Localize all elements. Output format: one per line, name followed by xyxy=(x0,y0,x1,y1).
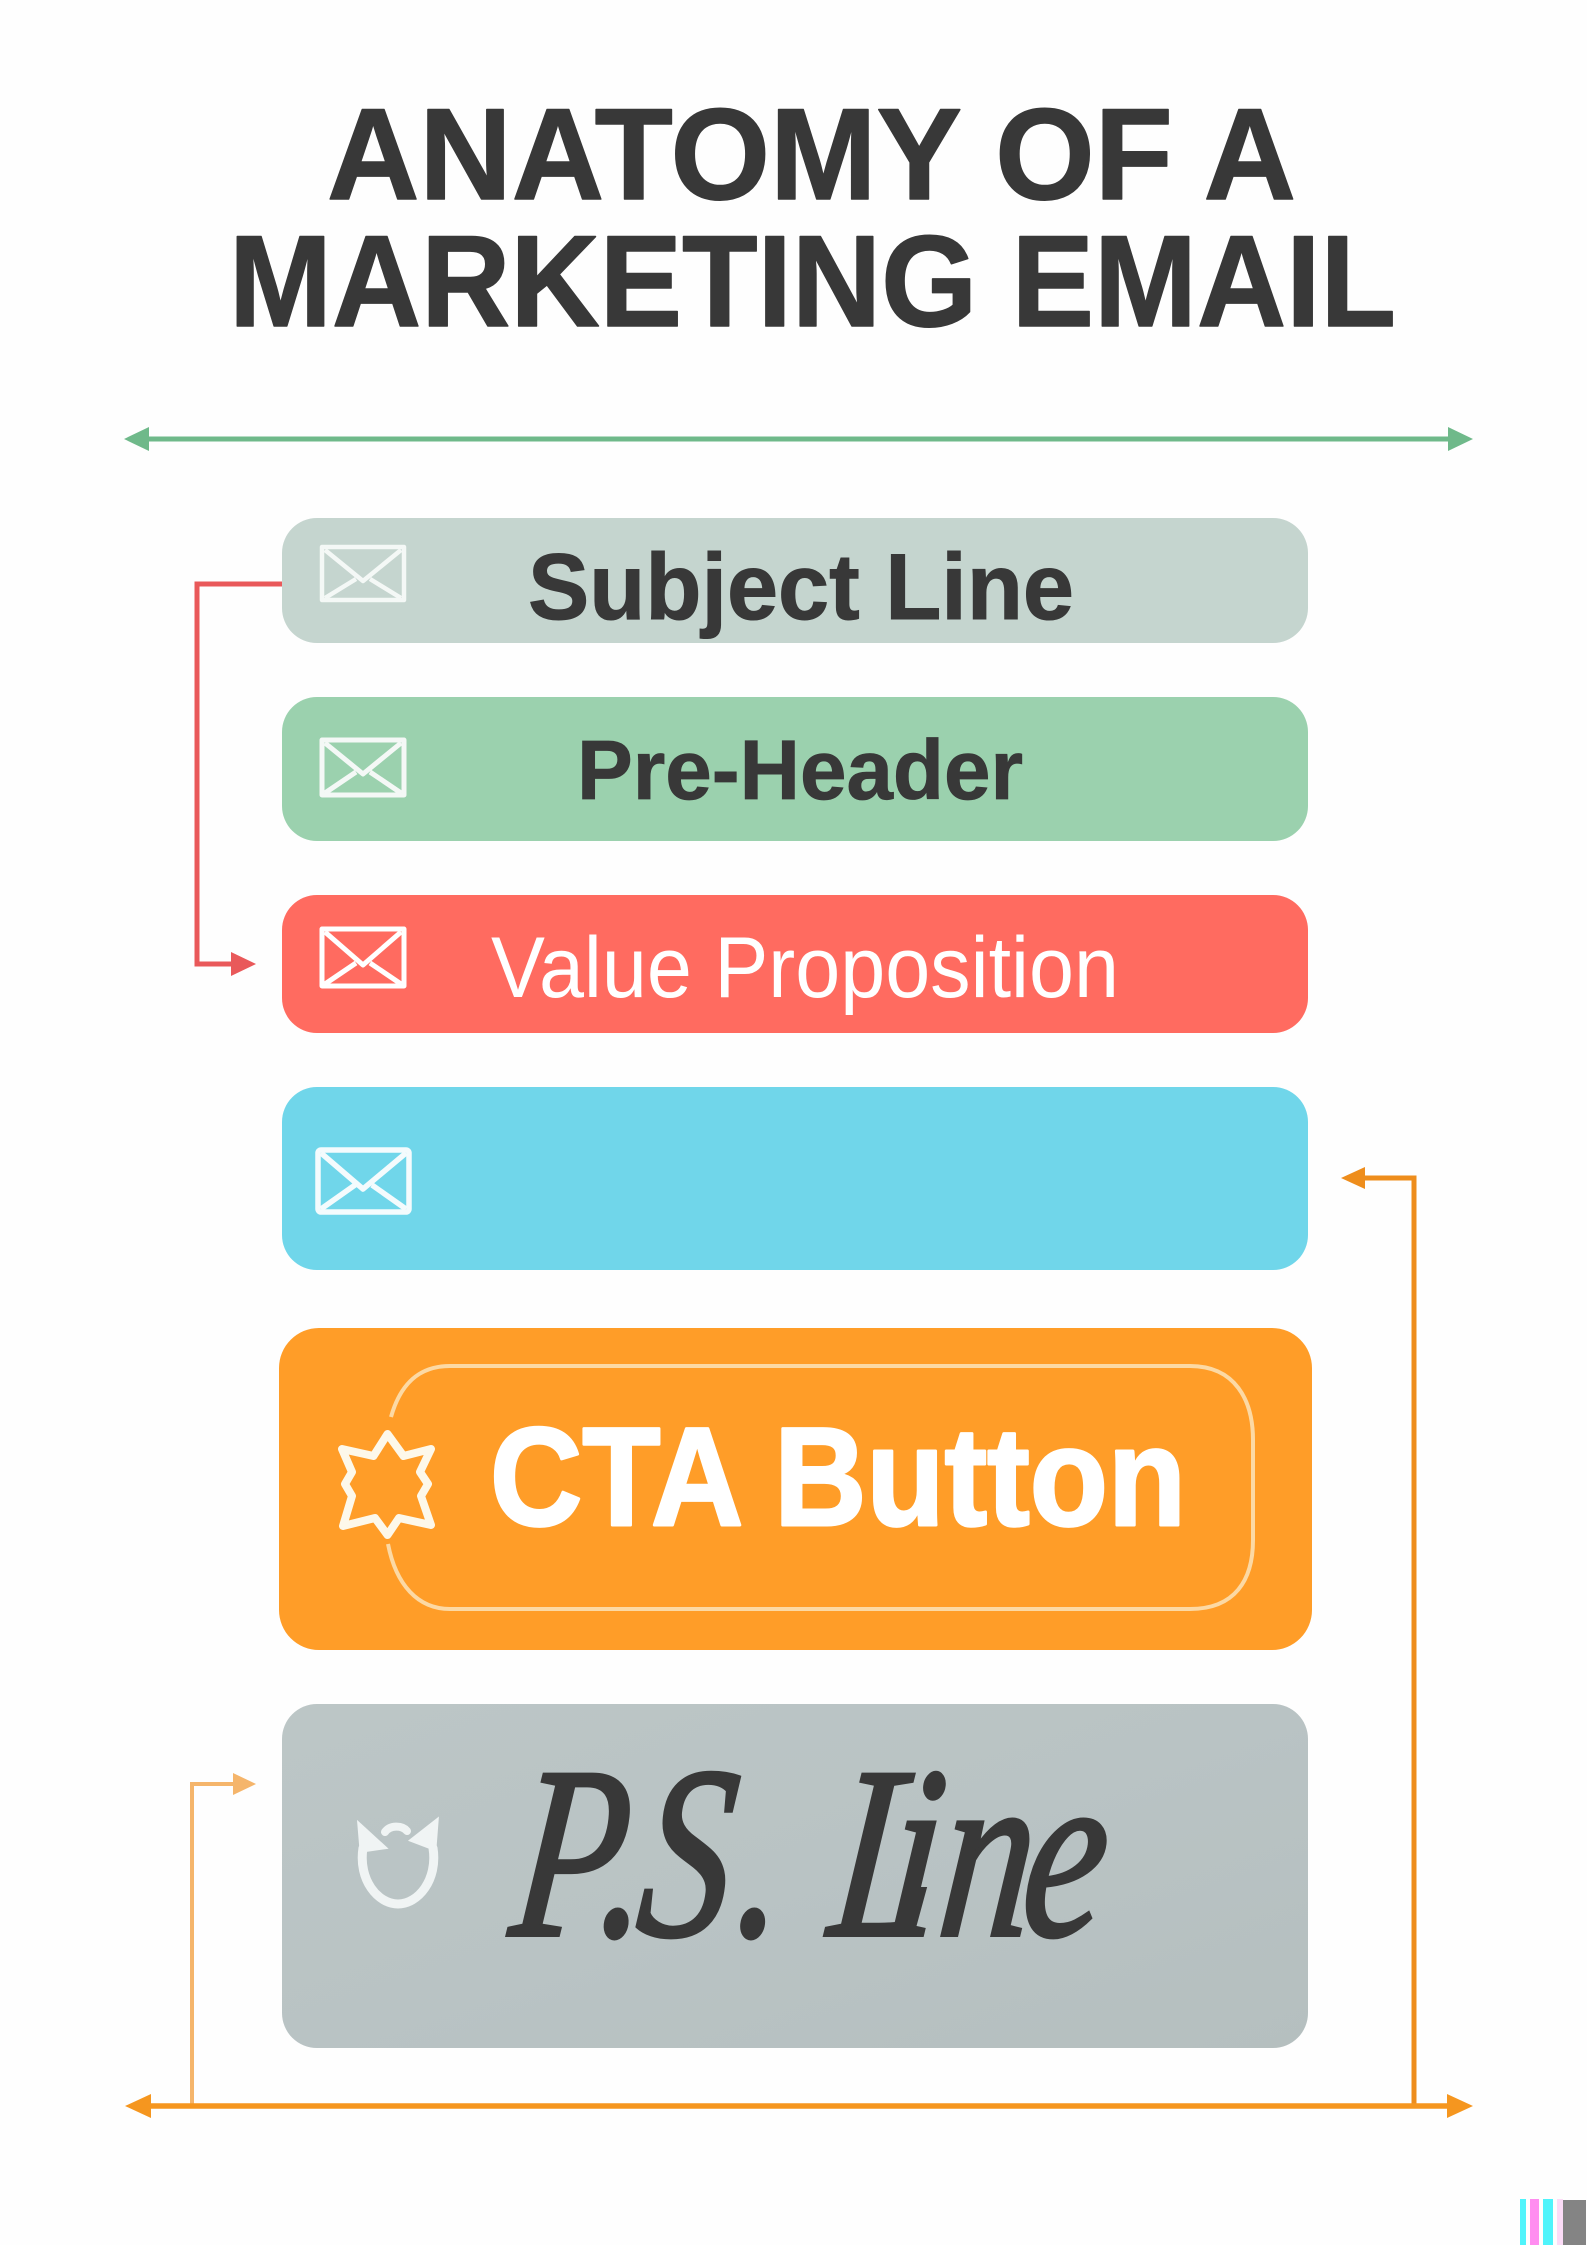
panel: P.S. line xyxy=(282,1704,1308,2048)
panel: CTA button xyxy=(279,1328,1312,1650)
title: MARKETING EMAIL xyxy=(229,208,1396,354)
arrow: orange connector from bottom rule to blue section xyxy=(1341,1167,1414,2106)
text: CTA button: CTA Button xyxy=(490,1398,1186,1555)
arrow: orange double-headed bottom rule xyxy=(125,2094,1473,2118)
panel: pre-header xyxy=(282,697,1308,841)
text: value proposition: Value Proposition xyxy=(491,920,1119,1016)
panel: value proposition xyxy=(282,895,1308,1033)
colour bars corner mark xyxy=(1520,2199,1586,2245)
icon: envelope pre-header xyxy=(322,740,404,795)
text: pre-header: Pre-Header xyxy=(577,723,1023,817)
icon: envelope value proposition xyxy=(322,929,404,986)
button outline xyxy=(388,1366,1253,1609)
icon: star badge xyxy=(342,1434,431,1535)
title: ANATOMY OF A xyxy=(327,81,1296,227)
panel: blue body section xyxy=(282,1087,1308,1270)
arrow: light orange connector to P.S. line xyxy=(192,1773,256,2106)
icon: alarm clock xyxy=(360,1822,436,1904)
text: subject line: Subject Line xyxy=(528,534,1074,639)
arrow: green double-headed divider xyxy=(124,427,1473,451)
icon: envelope subject line xyxy=(322,547,404,600)
title xyxy=(229,81,1396,354)
arrow: red connector from subject line to value proposition xyxy=(197,584,282,976)
panel: subject line xyxy=(282,518,1308,643)
text: P.S. line: P.S. Line xyxy=(501,1717,1122,1989)
icon: envelope body section xyxy=(318,1150,409,1212)
